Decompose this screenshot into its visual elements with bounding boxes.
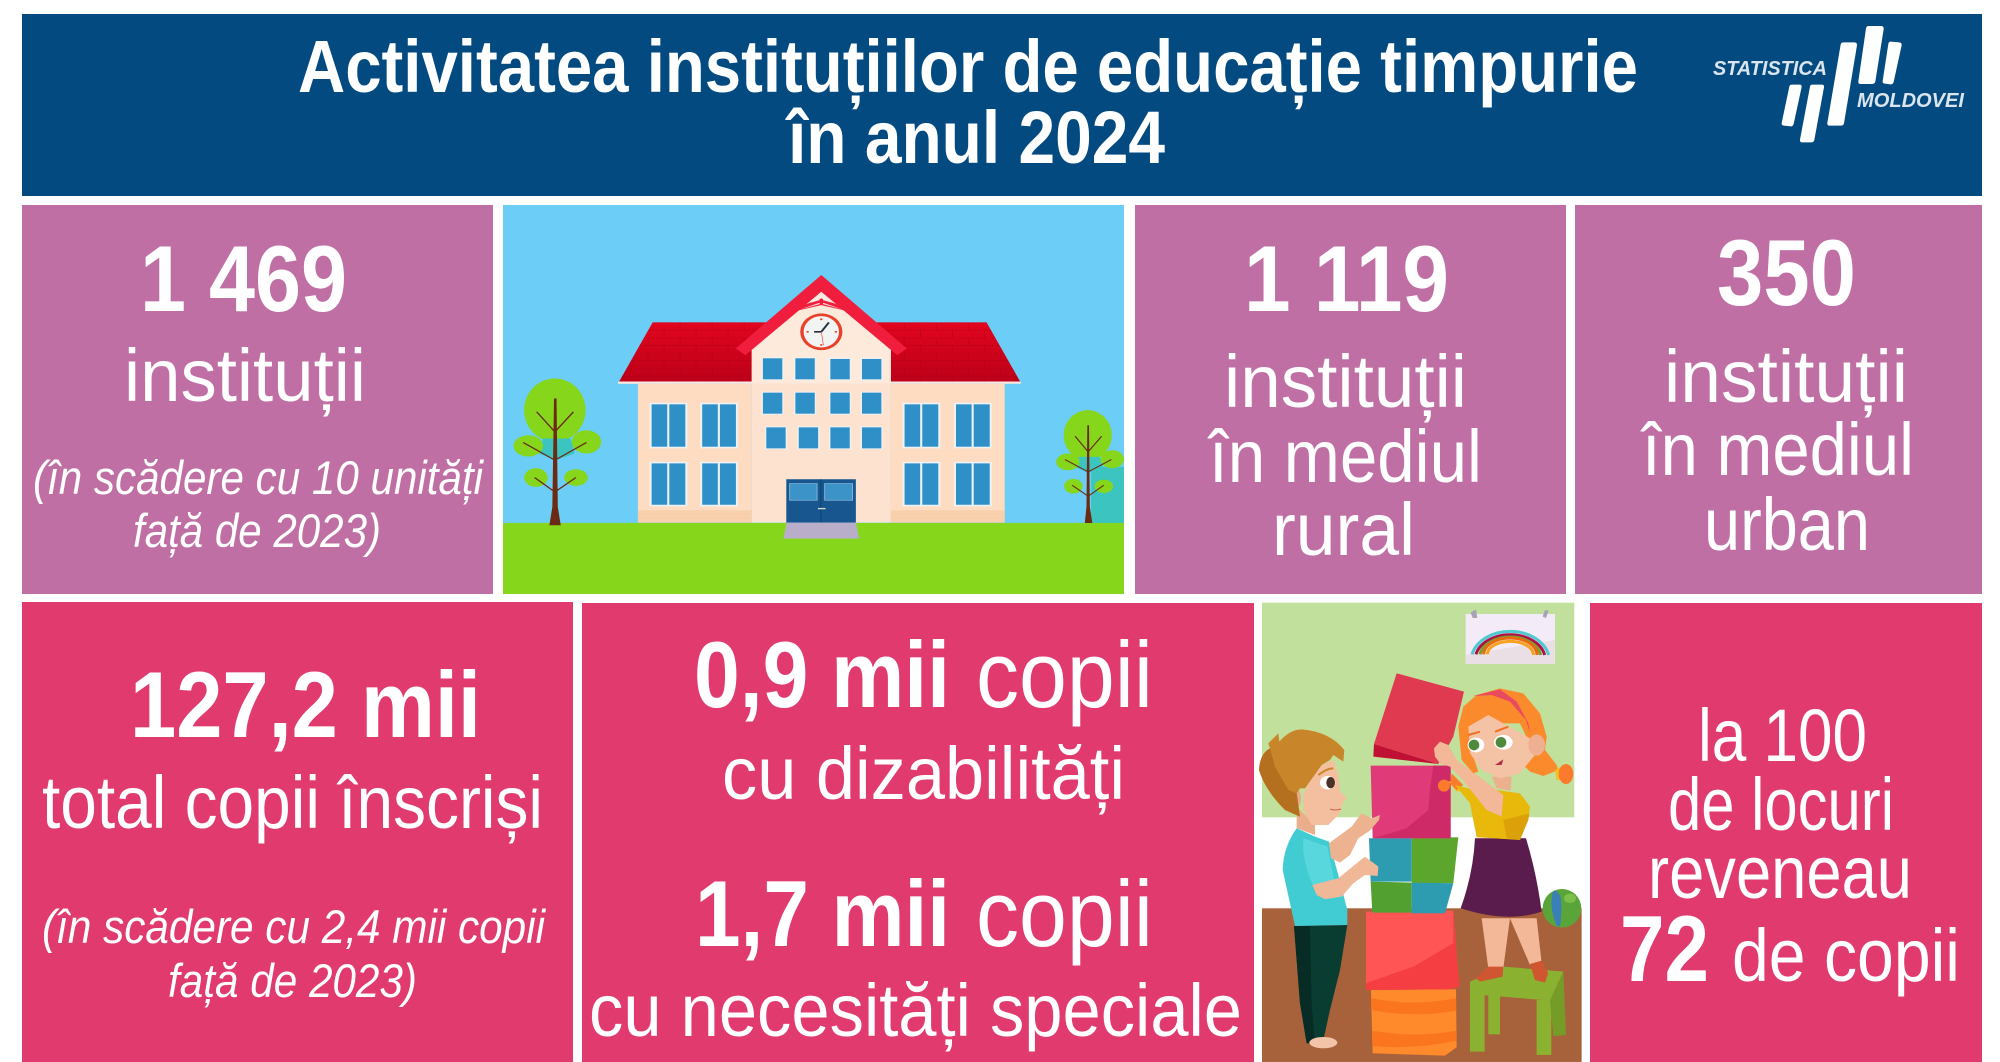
stat: 0,9 mii copii: copii <box>976 622 1153 727</box>
label: instituții în mediul rural: instituții <box>1224 340 1467 423</box>
note: decrease vs 2023 <box>42 900 546 1007</box>
upper centre windows <box>762 358 882 449</box>
label: total copii înscriși: total copii înscriși <box>42 761 543 844</box>
title <box>298 25 1638 179</box>
wing windows <box>651 404 991 506</box>
block stack <box>1366 673 1464 1056</box>
panel: total institutions <box>22 205 493 594</box>
panel: places per 100 <box>1590 603 1982 1062</box>
ball <box>1543 889 1581 928</box>
note: decrease vs 2023: față de 2023) <box>133 504 381 557</box>
illustration: school building <box>503 205 1124 594</box>
clock <box>800 313 842 350</box>
number: 127,2 mii: 127,2 mii <box>130 652 481 757</box>
text: la 100 de locuri reveneau <box>1648 694 1912 914</box>
title: Activitatea instituțiilor de educație timpurie <box>298 25 1638 109</box>
logo: Statistica Moldovei <box>1713 26 1964 142</box>
illustration: children stacking blocks <box>1259 603 1582 1062</box>
panel: children with disabilities and special needs <box>582 603 1254 1062</box>
number: 1 469: 1 469 <box>140 226 347 331</box>
stat: 72 de copii: 72 <box>1620 896 1709 1001</box>
note: decrease vs 2023: (în scădere cu 2,4 mii copii <box>42 900 546 953</box>
boy <box>1259 729 1380 1048</box>
note: decrease vs 2023: (în scădere cu 10 unități <box>33 451 484 504</box>
roof <box>618 322 1021 384</box>
label: cu necesități speciale: cu necesități speciale <box>589 969 1242 1052</box>
number: 350: 350 <box>1717 220 1856 325</box>
panel: total children enrolled <box>22 602 573 1062</box>
tree left <box>514 378 601 525</box>
label: instituții în mediul rural: în mediul <box>1207 415 1482 498</box>
gable rafters <box>736 275 907 355</box>
stat: 1,7 mii copii: copii <box>976 861 1153 966</box>
note: decrease vs 2023 <box>33 451 484 557</box>
note: decrease vs 2023: față de 2023) <box>168 954 417 1007</box>
text: la 100 de locuri reveneau: reveneau <box>1648 831 1912 914</box>
girl <box>1434 688 1573 983</box>
label: instituții în mediul urban: instituții <box>1664 335 1908 418</box>
label: instituții în mediul urban: în mediul <box>1640 408 1914 491</box>
logo: Statistica Moldovei: STATISTICA <box>1713 58 1827 80</box>
label: instituții în mediul urban: urban <box>1704 483 1870 566</box>
title: în anul 2024 <box>785 96 1165 179</box>
label: cu dizabilități: cu dizabilități <box>722 732 1125 815</box>
logo: Statistica Moldovei: MOLDOVEI <box>1857 90 1964 112</box>
stat: 72 de copii: de copii <box>1732 914 1960 997</box>
text: la 100 de locuri reveneau: la 100 <box>1698 694 1867 777</box>
panel: rural institutions <box>1135 205 1566 594</box>
label: instituții în mediul rural: rural <box>1272 488 1415 571</box>
stat: 1,7 mii copii: 1,7 mii <box>695 861 950 966</box>
stat: 0,9 mii copii <box>694 622 1153 727</box>
label: instituții în mediul urban <box>1640 335 1914 566</box>
rainbow poster <box>1466 609 1555 664</box>
label: instituții în mediul rural <box>1207 340 1482 571</box>
tree right <box>1056 410 1124 523</box>
walls <box>638 384 752 523</box>
stool <box>1470 967 1566 1055</box>
door <box>786 479 856 523</box>
stat: 1,7 mii copii <box>695 861 1153 966</box>
number: 1 119: 1 119 <box>1244 226 1449 331</box>
panel: urban institutions <box>1575 205 1982 594</box>
entrance step <box>783 523 859 539</box>
stat: 72 de copii <box>1620 896 1960 1001</box>
stat: 0,9 mii copii: 0,9 mii <box>694 622 950 727</box>
label: instituții: instituții <box>124 334 366 417</box>
text: la 100 de locuri reveneau: de locuri <box>1668 763 1894 846</box>
header banner <box>22 14 1982 196</box>
